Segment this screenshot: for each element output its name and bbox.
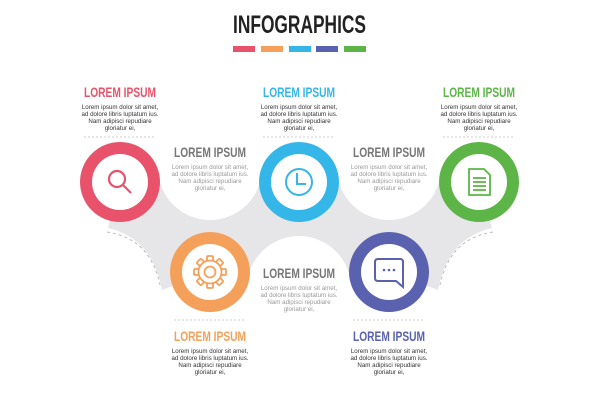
text: top blue <box>260 84 338 137</box>
circle: orange gear <box>170 232 250 312</box>
text: top red <box>81 84 159 137</box>
icon: chat bubble <box>375 259 403 287</box>
text: bottom orange: Nam adipisci repudiare <box>178 362 242 369</box>
text: gray cell 3 <box>260 265 338 313</box>
text: gray cell 3: Lorem ipsum dolor sit amet, <box>261 285 337 292</box>
text: gray cell 3: gloriatur ei, <box>284 306 315 313</box>
text: top green: gloriatur ei, <box>464 125 495 132</box>
text: top red: Nam adipisci repudiare <box>88 118 152 125</box>
text: top blue: Lorem ipsum dolor sit amet, <box>261 104 337 111</box>
text: top blue: ad dolore libris luptatum ius. <box>260 111 338 118</box>
gray connecting band <box>108 116 492 340</box>
text: gray cell 1: Nam adipisci repudiare <box>178 178 242 185</box>
text: bottom orange <box>171 320 249 376</box>
text: top blue: gloriatur ei, <box>284 125 315 132</box>
text: gray cell 3: LOREM IPSUM <box>263 265 335 281</box>
text: gray cell 2: gloriatur ei, <box>374 185 405 192</box>
text: top green: Lorem ipsum dolor sit amet, <box>441 104 517 111</box>
text: top red: gloriatur ei, <box>105 125 136 132</box>
text: top red: ad dolore libris luptatum ius. <box>81 111 159 118</box>
text: top green: ad dolore libris luptatum ius. <box>440 111 518 118</box>
text: bottom purple: LOREM IPSUM <box>353 328 425 344</box>
text: bottom purple: Nam adipisci repudiare <box>357 362 421 369</box>
icon: clock <box>286 169 312 195</box>
text: bottom orange: gloriatur ei, <box>195 369 226 376</box>
text: gray cell 2: LOREM IPSUM <box>353 144 425 160</box>
color bars legend <box>233 46 366 52</box>
text: gray cell 3: ad dolore libris luptatum ius. <box>260 292 338 299</box>
text: gray cell 1 <box>171 144 249 192</box>
text: top green <box>440 84 518 137</box>
text: gray cell 1: gloriatur ei, <box>195 185 226 192</box>
icon: magnifier <box>109 171 131 193</box>
text: gray cell 2: Nam adipisci repudiare <box>357 178 421 185</box>
text: gray cell 1: ad dolore libris luptatum ius. <box>171 171 249 178</box>
text: gray cell 1: Lorem ipsum dolor sit amet, <box>172 164 248 171</box>
text: top green: Nam adipisci repudiare <box>447 118 511 125</box>
circle: blue clock <box>259 142 339 222</box>
text: bottom purple <box>350 320 428 376</box>
icon: gear <box>194 256 226 288</box>
text: top blue: Nam adipisci repudiare <box>267 118 331 125</box>
text: gray cell 2 <box>350 144 428 192</box>
text: top green: LOREM IPSUM <box>443 84 515 100</box>
text: gray cell 2: ad dolore libris luptatum ius. <box>350 171 428 178</box>
circle: purple chat <box>349 232 429 312</box>
text: bottom purple: Lorem ipsum dolor sit amet, <box>351 348 427 355</box>
text: bottom purple: gloriatur ei, <box>374 369 405 376</box>
dashed curves <box>107 232 493 285</box>
text: bottom purple: ad dolore libris luptatum ius. <box>350 355 428 362</box>
circle: red search <box>80 142 160 222</box>
text: top blue: LOREM IPSUM <box>263 84 335 100</box>
title: INFOGRAPHICS <box>233 11 366 39</box>
text: bottom orange: LOREM IPSUM <box>174 328 246 344</box>
text: gray cell 1: LOREM IPSUM <box>174 144 246 160</box>
text: bottom orange: ad dolore libris luptatum ius. <box>171 355 249 362</box>
text: top red: Lorem ipsum dolor sit amet, <box>82 104 158 111</box>
text: gray cell 3: Nam adipisci repudiare <box>267 299 331 306</box>
text: gray cell 2: Lorem ipsum dolor sit amet, <box>351 164 427 171</box>
text: top red: LOREM IPSUM <box>84 84 156 100</box>
icon: document <box>469 169 490 195</box>
circle: green document <box>439 142 519 222</box>
text: bottom orange: Lorem ipsum dolor sit amet, <box>172 348 248 355</box>
